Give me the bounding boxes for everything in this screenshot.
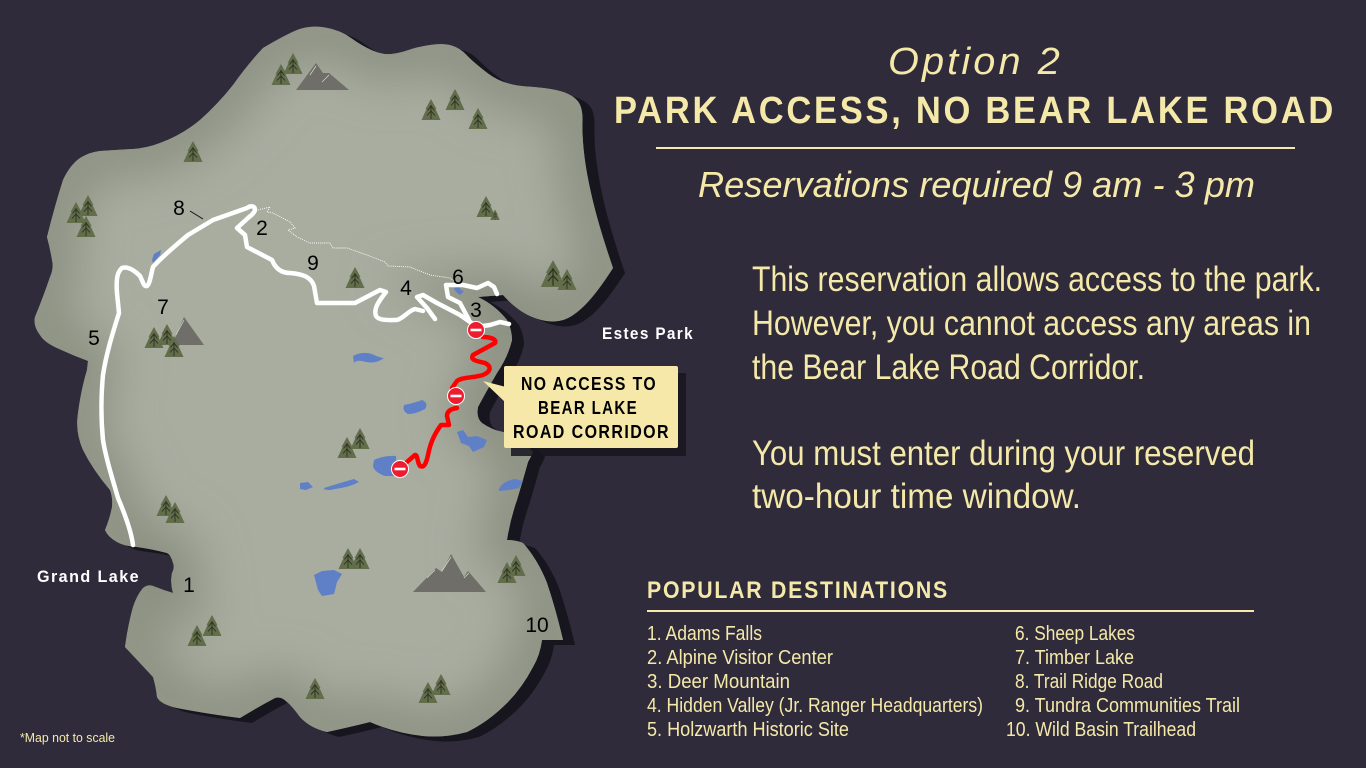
mountain: south bbox=[413, 554, 486, 592]
no entry marker: north bbox=[468, 322, 484, 338]
callout text: ROAD CORRIDOR bbox=[513, 422, 670, 442]
mountain: Timber Lake bbox=[172, 317, 204, 345]
map of the park bbox=[35, 27, 625, 741]
map land area bbox=[35, 27, 613, 736]
destinations list: column 2: 8. Trail Ridge Road bbox=[1015, 671, 1163, 693]
destinations list: column 1: 5. Holzwarth Historic Site bbox=[647, 719, 849, 741]
callout pointer bbox=[483, 381, 506, 403]
destinations list: column 1: 2. Alpine Visitor Center bbox=[647, 647, 833, 669]
destinations list: column 2 bbox=[1006, 623, 1240, 741]
road: toward Estes Park bbox=[476, 322, 509, 327]
no entry marker: south bbox=[392, 460, 408, 478]
callout: no access to Bear Lake Road Corridor bbox=[483, 366, 686, 456]
label: Estes Park: Estes Park bbox=[602, 324, 694, 343]
map location numbers: 9 bbox=[307, 252, 319, 275]
mountain: north bbox=[296, 63, 349, 90]
map location numbers: 2 bbox=[256, 217, 268, 240]
road: Trail Ridge Road west side bbox=[102, 206, 423, 545]
map location numbers: 6 bbox=[452, 266, 464, 289]
popular destinations heading: POPULAR DESTINATIONS bbox=[647, 577, 949, 604]
trees in front of Timber Lake mountain bbox=[144, 324, 184, 357]
map location numbers: 5 bbox=[88, 327, 100, 350]
subtitle: Reservations required 9 am - 3 pm bbox=[698, 164, 1255, 205]
label: Grand Lake: Grand Lake bbox=[37, 567, 140, 586]
map location numbers: 10 bbox=[525, 614, 549, 637]
no entry marker: middle bbox=[448, 388, 464, 404]
title rule bbox=[656, 147, 1295, 149]
destinations list: column 1: 1. Adams Falls bbox=[647, 623, 762, 645]
note: map not to scale: *Map not to scale bbox=[20, 730, 115, 745]
map location numbers: 7 bbox=[157, 296, 169, 319]
map location numbers: 1 bbox=[183, 574, 195, 597]
body text: You must enter during your reserved bbox=[752, 434, 1255, 473]
map drop shadow bbox=[47, 32, 625, 741]
leader line for Trail Ridge Road bbox=[190, 211, 203, 219]
destinations list: column 2: 7. Timber Lake bbox=[1015, 647, 1134, 669]
trees bbox=[66, 53, 576, 703]
lakes bbox=[152, 250, 523, 596]
destinations list: column 2: 6. Sheep Lakes bbox=[1015, 623, 1135, 645]
callout text: BEAR LAKE bbox=[538, 398, 638, 418]
road: Sheep Lakes loop bbox=[446, 283, 497, 320]
dotted trail bbox=[258, 207, 458, 284]
destinations rule bbox=[647, 610, 1254, 612]
map location numbers: 3 bbox=[470, 299, 482, 322]
map location numbers: 8 bbox=[173, 197, 185, 220]
map location numbers bbox=[88, 197, 549, 637]
destinations list: column 2: 9. Tundra Communities Trail bbox=[1015, 695, 1240, 717]
body text bbox=[752, 260, 1322, 516]
destinations list: column 1 bbox=[647, 623, 983, 741]
road: Hidden Valley spur bbox=[417, 295, 473, 324]
body text: two-hour time window. bbox=[752, 477, 1081, 516]
open roads in white bbox=[102, 206, 509, 545]
destinations list: column 2: 10. Wild Basin Trailhead bbox=[1006, 719, 1196, 741]
callout text bbox=[513, 374, 670, 442]
map location numbers: 4 bbox=[400, 277, 412, 300]
destinations list: column 1: 4. Hidden Valley (Jr. Ranger Headquarters) bbox=[647, 695, 983, 717]
body text: the Bear Lake Road Corridor. bbox=[752, 348, 1145, 387]
callout box bbox=[504, 366, 678, 448]
callout text: NO ACCESS TO bbox=[521, 374, 657, 394]
closed road in red bbox=[407, 337, 495, 467]
callout shadow bbox=[511, 373, 686, 456]
heading: option: Option 2 bbox=[888, 41, 1063, 83]
destinations list: column 1: 3. Deer Mountain bbox=[647, 671, 790, 693]
